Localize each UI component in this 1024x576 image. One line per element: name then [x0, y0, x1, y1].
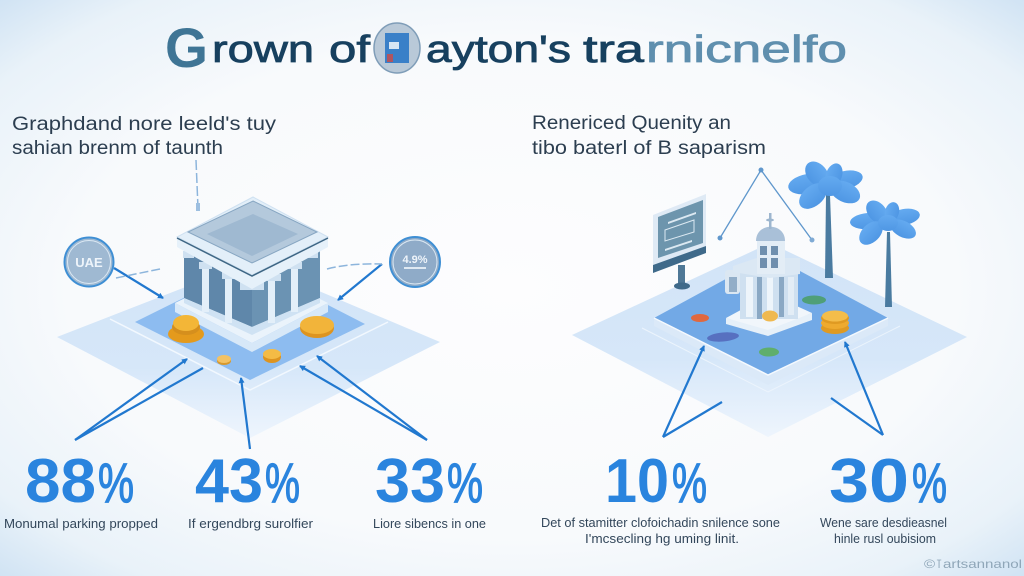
stat: 33%: [373, 447, 486, 531]
map blotches: [691, 296, 826, 356]
stat: 10%: %: [672, 451, 707, 514]
diagram: thin triangle above dome: [718, 168, 814, 242]
stat: 30%: hinle rusl oubisiom: [834, 532, 936, 546]
stat: 30%: %: [912, 451, 947, 514]
stat: 10%: 10: [605, 447, 669, 516]
right heading: [532, 113, 766, 159]
stat: 88%: [4, 447, 158, 531]
icon: domed building: [725, 213, 812, 336]
left heading: Graphdand nore leeld's tuy: [12, 114, 277, 135]
right heading: tibo baterl of B saparism: [532, 138, 766, 159]
right heading: Renericed Quenity an: [532, 113, 731, 134]
icon: palm trees: [787, 157, 921, 307]
title: of: [329, 29, 371, 71]
stat: 43%: 43: [195, 447, 263, 516]
icon: gold coins right: [821, 310, 849, 334]
left heading: sahian brenm of taunth: [12, 138, 223, 159]
icon: title emblem: [374, 23, 420, 73]
callout: right badge: [390, 237, 440, 287]
title: [165, 16, 847, 79]
stat: 10%: [541, 447, 780, 546]
arrows: left building callouts: [114, 160, 382, 300]
arrows: right statistics: [663, 342, 883, 437]
stat: 33%: %: [447, 451, 483, 514]
title: rown: [212, 29, 314, 71]
panel: right isometric platform: [572, 243, 967, 437]
stat: 33%: Liore sibencs in one: [373, 517, 486, 531]
stat: 10%: I'mcsecling hg uming linit.: [585, 532, 739, 546]
stat: 30%: 30: [829, 447, 909, 516]
title: G: [165, 16, 208, 79]
stat: 30%: [820, 447, 947, 546]
title: ayton's: [426, 29, 571, 71]
icon: gold coins left: [168, 315, 334, 365]
stat: 43%: If ergendbrg surolfier: [188, 517, 313, 531]
title: rnicnelfo: [646, 29, 847, 71]
title: tra: [583, 29, 645, 71]
arrows: left statistics: [75, 356, 427, 449]
watermark: ©⊺artsannanol: [924, 557, 1022, 571]
stat: 43%: %: [265, 451, 300, 514]
callout: left badge: UAE: [75, 255, 103, 270]
stat: 33%: 33: [375, 447, 445, 516]
stat: 10%: Det of stamitter clofoichadin snilence sone: [541, 516, 780, 530]
stat: 88%: 88: [25, 447, 96, 516]
panel: left isometric platform: [57, 262, 440, 438]
icon: left bank building: [175, 197, 328, 352]
callout: right badge: 4.9%: [402, 254, 428, 266]
stat: 88%: Monumal parking propped: [4, 517, 158, 531]
icon: billboard: [653, 194, 706, 290]
stat: 43%: [188, 447, 313, 531]
stat: 88%: %: [98, 451, 134, 514]
stat: 30%: Wene sare desdieasnel: [820, 516, 947, 530]
left heading: [12, 114, 277, 159]
callout: left badge: [64, 238, 114, 286]
